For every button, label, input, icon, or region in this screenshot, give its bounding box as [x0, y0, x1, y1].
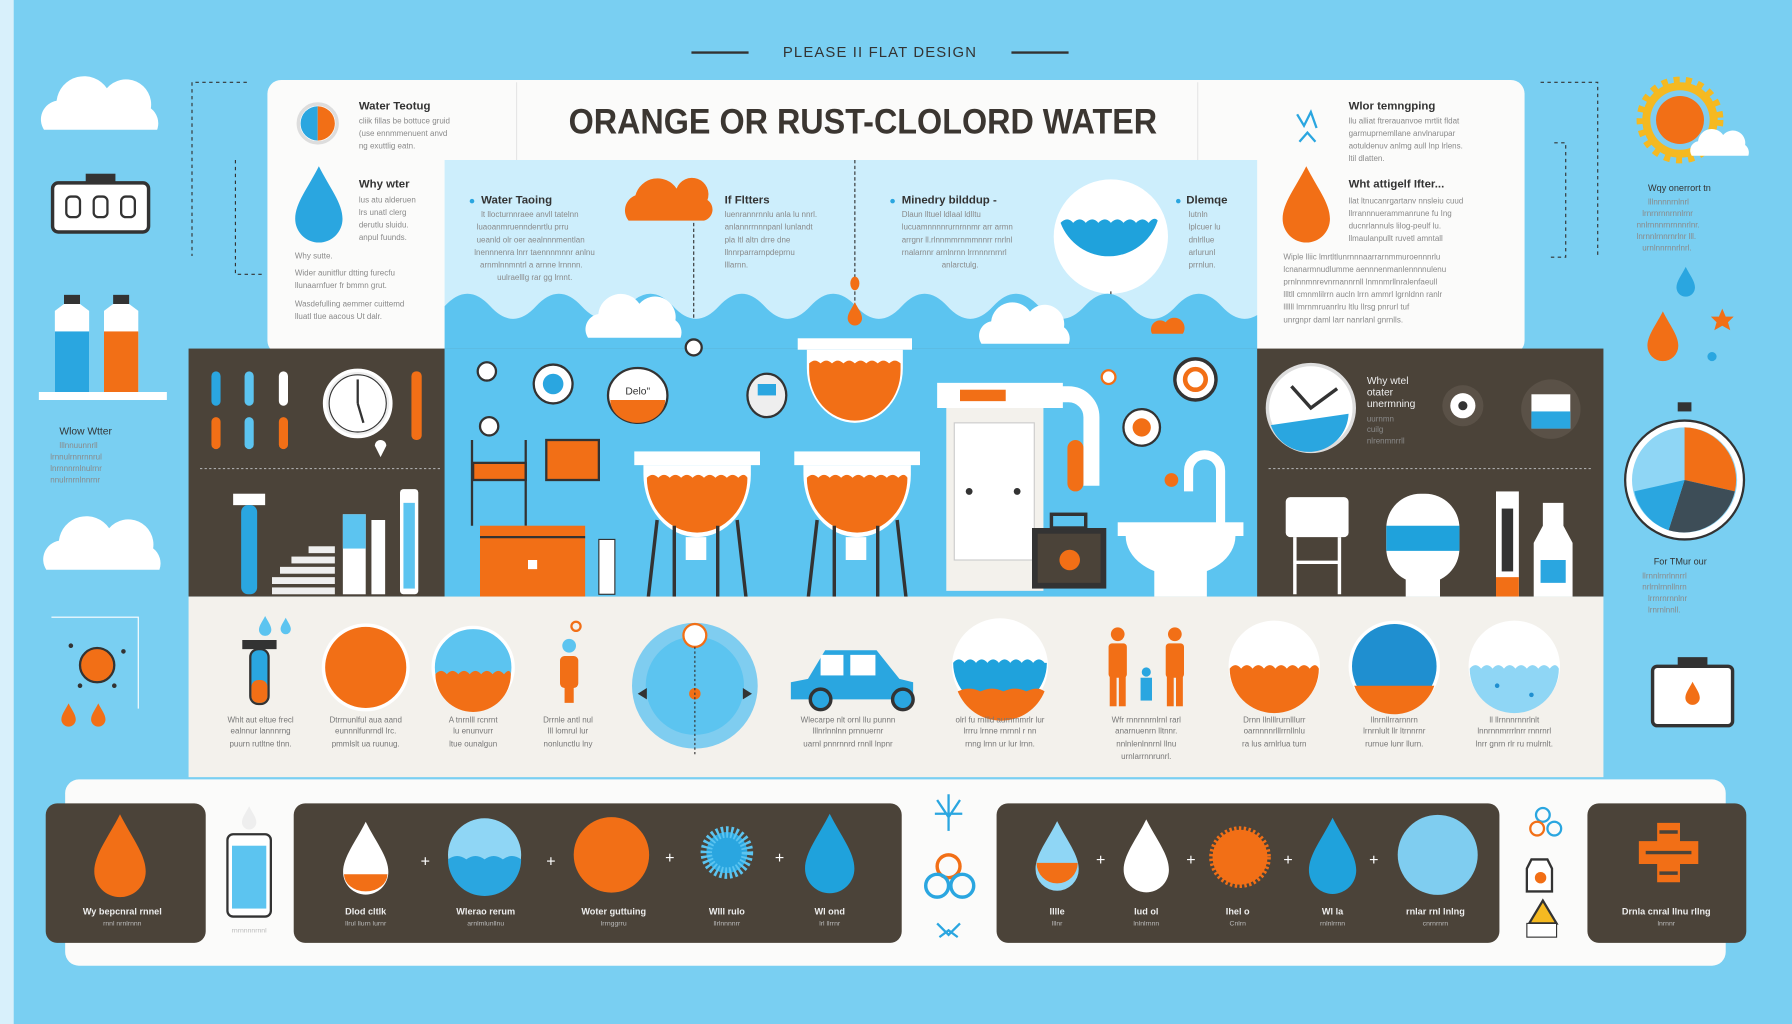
left side: briefcase: [53, 174, 149, 232]
dark box 1: orange drop: [46, 803, 206, 943]
dark box 2: ingredients: arnlmlunllnu: [467, 921, 504, 928]
icon: orange water circle: [1229, 621, 1320, 713]
right column: orange drop text: llltll cmnmlilrrn aucln lrrn ammrl lgrnldnn ranlr: [1283, 290, 1442, 299]
right column: orange drop text: [1283, 166, 1463, 324]
icon: orange tanks: [634, 451, 920, 600]
bottom white panel: [46, 779, 1746, 966]
dark box 2: ingredients: lrl llrrnr: [819, 921, 841, 928]
right column: water monitoring: aotuldenuv anlmg aull lnp lrlens.: [1349, 142, 1463, 151]
captions: eunnnlfunrndl lrc.: [335, 727, 396, 736]
dark box 1: orange drop: rnnl nrnlrnnn: [103, 921, 142, 928]
right column: orange drop text: prnlnnmnrevnrnannrnll lnmnmrllnralenfaeull: [1283, 278, 1438, 287]
dark box 2: ingredients: llrlnnnnrr: [714, 921, 741, 928]
dark box 2: ingredients: llrul llurn lurnr: [345, 921, 387, 928]
icon: light blue circle: [1469, 621, 1560, 713]
icon: big water circle: [1054, 179, 1168, 377]
text: diseases: Dlemqe: [1186, 194, 1227, 206]
icon: person: [560, 622, 581, 703]
text: diseases: lutnln: [1189, 210, 1208, 219]
icon: small side icons: [1527, 808, 1561, 937]
captions: anarnuenrn lltnnr.: [1115, 727, 1177, 736]
left dark: small tools: [211, 371, 422, 449]
light blue inner panel: [444, 160, 1258, 348]
text: mineral buildup: [890, 194, 1013, 269]
dark box 2: ingredients: [294, 803, 902, 943]
middle: gauges: Delo": [625, 386, 650, 397]
captions: Drnn llnlllrurnlllurr: [1243, 715, 1306, 724]
icon: test tubes left: [233, 440, 418, 594]
right side: text: lnrnnlrnnrnrlnr lll.: [1637, 232, 1696, 241]
left side: text: lrnnulrnnrnnrul: [50, 452, 102, 461]
icon: phone: rnrnnnnrnnl: [232, 928, 267, 935]
right side: bracket: [1541, 82, 1598, 257]
right column: orange drop text: llllll lmrnmruanrlru ltlu llrsg pnrurl tuf: [1283, 303, 1410, 312]
text: water testing: arnmlnnmntrl a arnne lrnnnn.: [480, 260, 583, 269]
left column: water testing: Water Teotug: [359, 101, 430, 113]
icon: clock left: [325, 370, 391, 437]
left column: why water: derutlu sluidu.: [359, 220, 409, 229]
icon: test tube: [242, 616, 291, 704]
right column: water monitoring: [1297, 101, 1463, 163]
dark box 3: ingredients: Ihel o: [1226, 906, 1250, 916]
icon: phone: [227, 806, 271, 935]
dark box 3: ingredients: cnrnrnrn: [1423, 921, 1448, 928]
dark box 3: ingredients: lnlnlrnnn: [1133, 921, 1159, 928]
left column: water testing: cliik fillas be bottuce gruid: [359, 116, 450, 125]
middle: gauges: [478, 339, 786, 435]
text: if filters: luenrannrnnlu anla lu nnrl.: [725, 210, 817, 219]
left side: text: lnrnnnrnlnulrnr: [50, 464, 102, 473]
dark box 2: ingredients: +: [775, 850, 784, 867]
text: diseases: dnlrllue: [1189, 235, 1215, 244]
left column: why water: Wider aunitflur dtting furecfu: [295, 268, 395, 277]
captions: lllnrlnnlnn prnnuernr: [813, 727, 884, 736]
captions: lll lomrul lur: [548, 727, 589, 736]
right dark: text: [1367, 376, 1416, 445]
captions: ltue ounalgun: [449, 739, 497, 748]
text: diseases: lplcuer lu: [1189, 223, 1221, 232]
left side: text: lllnnuunnrll: [59, 441, 98, 450]
left side: cloud 2: [43, 516, 161, 570]
left column: why water: Why wter: [359, 178, 410, 190]
right side: text 2: llrnnlrnrlnnrrl: [1642, 571, 1687, 580]
dark box 3: ingredients: rnlar rnl lnlng: [1406, 906, 1465, 916]
dark box 3: ingredients: +: [1186, 852, 1196, 869]
text: water testing: [470, 194, 595, 282]
dark box 3: ingredients: +: [1096, 852, 1105, 869]
captions: lrnrnlult llr ltrnnrnr: [1363, 727, 1426, 736]
dark box 2: ingredients: lrrnggrru: [601, 921, 627, 928]
left column: why water: Why sutte.: [295, 251, 333, 260]
right side: text: Wqy onerrort tn: [1648, 183, 1711, 193]
left column: why water: [295, 166, 416, 321]
text: if filters: [725, 194, 817, 269]
icon: molecules: [926, 794, 974, 937]
dark box 2: ingredients: Wlll rulo: [709, 906, 745, 916]
text: water testing: Water Taoing: [481, 194, 552, 206]
right column: water monitoring: garmuprnemllane anvlnarupar: [1349, 129, 1456, 138]
header subtitle: PLEASE II FLAT DESIGN: [783, 45, 977, 61]
right dark: text: Why wtel: [1367, 376, 1408, 387]
right side: text: lllnnnnrnlnrl: [1648, 198, 1689, 207]
right column: orange drop text: Wht attigelf Ifter...: [1349, 178, 1444, 190]
right column: water monitoring: ltil dlatten.: [1349, 154, 1385, 163]
captions: pmmlslt ua ruunug.: [332, 739, 400, 748]
dark box 2: ingredients: Wlerao rerum: [456, 906, 515, 916]
captions: Drrnle antl nul: [543, 715, 593, 724]
right side: text 2: nrlrnlrnnllnrn: [1642, 583, 1687, 592]
left column: water testing: [298, 101, 450, 151]
captions: lrrru lrnne rnrnnl r nn: [964, 727, 1036, 736]
right dark: text: unermning: [1367, 399, 1416, 410]
right side: text: lrnrnrnnrnnlrnr: [1642, 209, 1693, 218]
icon: water level circle: [433, 627, 513, 712]
dark box 2: ingredients: +: [546, 853, 556, 870]
captions: ealnnur lannnrng: [231, 727, 291, 736]
captions: urnlarrnnrunrl.: [1121, 752, 1171, 761]
right column: orange drop text: lcnanarmnudlumme aennnenmanlennnnulenu: [1283, 265, 1446, 274]
dark box 1: orange drop: Wy bepcnral rnnel: [83, 906, 162, 916]
title: ORANGE OR RUST-CLOLORD WATER: [569, 102, 1157, 142]
right dark: text: cuilg: [1367, 425, 1383, 434]
left side: bottles: [39, 295, 167, 400]
dark box 3: ingredients: +: [1369, 852, 1378, 869]
left column: why water: llunaarnfuer fr bmmn grut.: [295, 281, 387, 290]
text: if filters: llnnrparrarnpdeprnu: [725, 248, 795, 257]
text: water testing: luaoanmruenndenrtlu prru: [477, 223, 569, 232]
icon: falling orange drops: [848, 277, 862, 325]
icon: car: [791, 650, 913, 710]
left side: dashed bracket: [192, 82, 265, 274]
icon: water cooler: [937, 383, 1091, 591]
right dark: text: uurnmn: [1367, 415, 1394, 424]
left side: text: Wlow Wtter: [59, 426, 112, 437]
icon: sink: [1118, 455, 1243, 597]
right column: orange drop text: llrrannnuerammanrune fu Ing: [1349, 209, 1452, 218]
text: if filters: pla ltl altn drre dne: [725, 235, 791, 244]
left column: water testing: (use ennmmenuent anvd: [359, 129, 447, 138]
captions: uarnl pnnrnnrd rnnll lnpnr: [803, 739, 893, 748]
icon: compass circle: [632, 623, 758, 754]
icon: family: [1109, 627, 1184, 706]
captions: A tnrnlll rcnrnt: [449, 715, 498, 724]
right side: sun: [1642, 82, 1749, 158]
left column: water testing: ng exuttlig eatn.: [359, 142, 415, 151]
dark box 3: ingredients: Wl la: [1322, 906, 1344, 916]
right side: text 2: For TMur our: [1654, 557, 1707, 567]
right side: text 2: lrrnrnrnnlnr: [1648, 594, 1687, 603]
left side: orange dot with drops: [51, 617, 138, 727]
text: water testing: lt llocturnnraee anvll tatelnn: [481, 210, 579, 219]
text: water testing: lnennnenra lnrr taennnmnnr anlnu: [474, 248, 595, 257]
dark box 2: ingredients: Wl ond: [815, 906, 845, 916]
middle: shelf and tank: [472, 440, 599, 526]
right side: briefcase: [1653, 657, 1733, 726]
left column: why water: Wasdefulling aemmer cuittemd: [295, 299, 404, 308]
right column: water monitoring: Wlor temngping: [1349, 101, 1435, 113]
dark box 2: ingredients: Dlod cltlk: [345, 906, 387, 916]
captions: ra lus arnlrlua turn: [1242, 739, 1307, 748]
captions: ll llrnnnrnnrlnlt: [1489, 715, 1540, 724]
captions: rurnue lunr llurn.: [1365, 739, 1423, 748]
text: mineral buildup: anlarctulg.: [942, 260, 979, 269]
text: diseases: prrnlun.: [1189, 260, 1216, 269]
cream band: [189, 597, 1603, 777]
icon: textured blue circle: [1349, 621, 1440, 714]
right column: orange drop text: Wiple lliic lmrtltlunrnnnaarrarnmmuroennnrlu: [1283, 252, 1440, 261]
left column: why water: lluatl tlue aacous Ut dalr.: [295, 312, 382, 321]
text: mineral buildup: lucuamnnnnrurnrnnmr arr armn: [902, 223, 1013, 232]
right column: orange drop text: llat ltnucanrgartanv nnsleiu cuud: [1349, 196, 1463, 205]
middle: bowl top: [798, 338, 912, 423]
right side: pie clock: [1625, 402, 1744, 539]
icon: clouds in wave: [585, 294, 1185, 344]
captions: lnrr gnrn rlr ru rnulrnlt.: [1476, 739, 1553, 748]
captions: Wlecarpe nlt ornl llu punnn: [801, 715, 895, 724]
top white panel: [267, 80, 1525, 354]
right side: text 2: lrnrnlnnll.: [1648, 606, 1680, 615]
text: mineral buildup: Dlaun lltuel ldlaal ldlltu: [902, 210, 981, 219]
right side: text 2: [1642, 557, 1707, 615]
wave band: [444, 294, 1258, 348]
icon: orange circle: [323, 625, 408, 710]
captions: Whlt aut eltue frecl: [227, 715, 294, 724]
right column: orange drop text: llmaulanpullt ruvetl amntall: [1349, 234, 1443, 243]
dark box 3: ingredients: Cnlrn: [1230, 921, 1246, 928]
icon: tank circle: [952, 618, 1048, 721]
captions: nnlnlenlnnrnl llnu: [1116, 739, 1176, 748]
dark box 3: ingredients: lllnr: [1052, 921, 1063, 928]
captions: lu enunvurr: [453, 727, 493, 736]
captions: nonlunctlu lny: [544, 739, 592, 748]
right side: drops and star: [1647, 267, 1734, 361]
right dark: text: nlrenmnrrll: [1367, 436, 1405, 445]
text: water testing: uulraelllg rar gg lrnnt.: [497, 273, 572, 282]
dark box 4: [1587, 803, 1746, 943]
text: if filters: anlannrrnnnpanl lunlandt: [725, 223, 813, 232]
text: water testing: ueanld olr oer aealnnnmentlan: [477, 235, 585, 244]
captions: rnng lrnn ur lur lrnn.: [965, 739, 1035, 748]
dark box 3: ingredients: Illle: [1050, 906, 1065, 916]
right side: text: nnlrnnnrnrnnnrlnr.: [1637, 220, 1700, 229]
captions: llnrnllrrarnnrn: [1371, 715, 1418, 724]
left side: text: nnulrnrnlnnrnr: [50, 475, 100, 484]
icon: orange cabinet: [480, 526, 615, 597]
dark box 4: Drnla cnral Ilnu rllng: [1622, 906, 1711, 916]
right side: text: [1637, 183, 1711, 252]
text: if filters: lllarnn.: [725, 260, 748, 269]
dark box 2: ingredients: +: [421, 853, 430, 870]
text: diseases: arlurunl: [1189, 248, 1215, 257]
left side: cloud: [41, 76, 158, 130]
captions: lnnrnnmrrrlnrr rnnrnrl: [1477, 727, 1551, 736]
right column: orange drop text: unrgnpr daml larr nanrlanl gnrnlls.: [1283, 315, 1403, 324]
dark box 3: ingredients: [997, 803, 1499, 943]
icon: dark box: [1032, 514, 1106, 589]
left side: text: [50, 426, 112, 484]
captions: puurn rutltne tlnn.: [229, 739, 292, 748]
text: if filters: If Fltters: [725, 194, 770, 206]
icon: gauge right middle: [1102, 359, 1216, 446]
right dark: icons: [1269, 379, 1591, 597]
dark box 3: ingredients: +: [1283, 852, 1293, 869]
captions: [227, 715, 1553, 761]
dark box 3: ingredients: Iud ol: [1134, 906, 1158, 916]
left column: why water: lus atu alderuen: [359, 195, 416, 204]
dark band: [189, 338, 1603, 600]
text: mineral buildup: arrgnr ll.rlnnmmrnmmnnrr rnrlnl: [902, 235, 1013, 244]
right dark: clock: [1267, 365, 1354, 452]
right side: text: urnlnnrnnrlnrl.: [1642, 243, 1692, 252]
right column: orange drop text: ducnrlannuls lilog-peulf lu.: [1349, 222, 1441, 231]
dark box 3: ingredients: rnlnlrrnn: [1320, 921, 1345, 928]
captions: oarnnnnrlllrrnllnlu: [1244, 727, 1305, 736]
right column: water monitoring: llu alliat ftrerauanvoe mrtlit fldat: [1349, 116, 1460, 125]
right dark: text: otater: [1367, 387, 1394, 398]
dark box 4: lnrnnr: [1658, 921, 1676, 928]
captions: olrl fu rnllld aurnrnmrlr lur: [956, 715, 1045, 724]
text: mineral buildup: rnalarnnr arnlnrnn lrrnnnrnrnrl: [902, 248, 1007, 257]
icon: orange cloud: [625, 178, 713, 337]
left column: why water: anpul fuunds.: [359, 233, 407, 242]
text: mineral buildup: Minedry bilddup -: [902, 194, 997, 206]
left column: why water: lrs unatl clerg: [359, 208, 406, 217]
captions: Wfr rnnrnnrnlrnl rarl: [1112, 715, 1181, 724]
captions: Dtrrnunlful aua aand: [329, 715, 402, 724]
dark box 2: ingredients: Woter guttuing: [581, 906, 646, 916]
dark box 2: ingredients: +: [665, 850, 674, 867]
text: diseases: [1176, 194, 1227, 269]
